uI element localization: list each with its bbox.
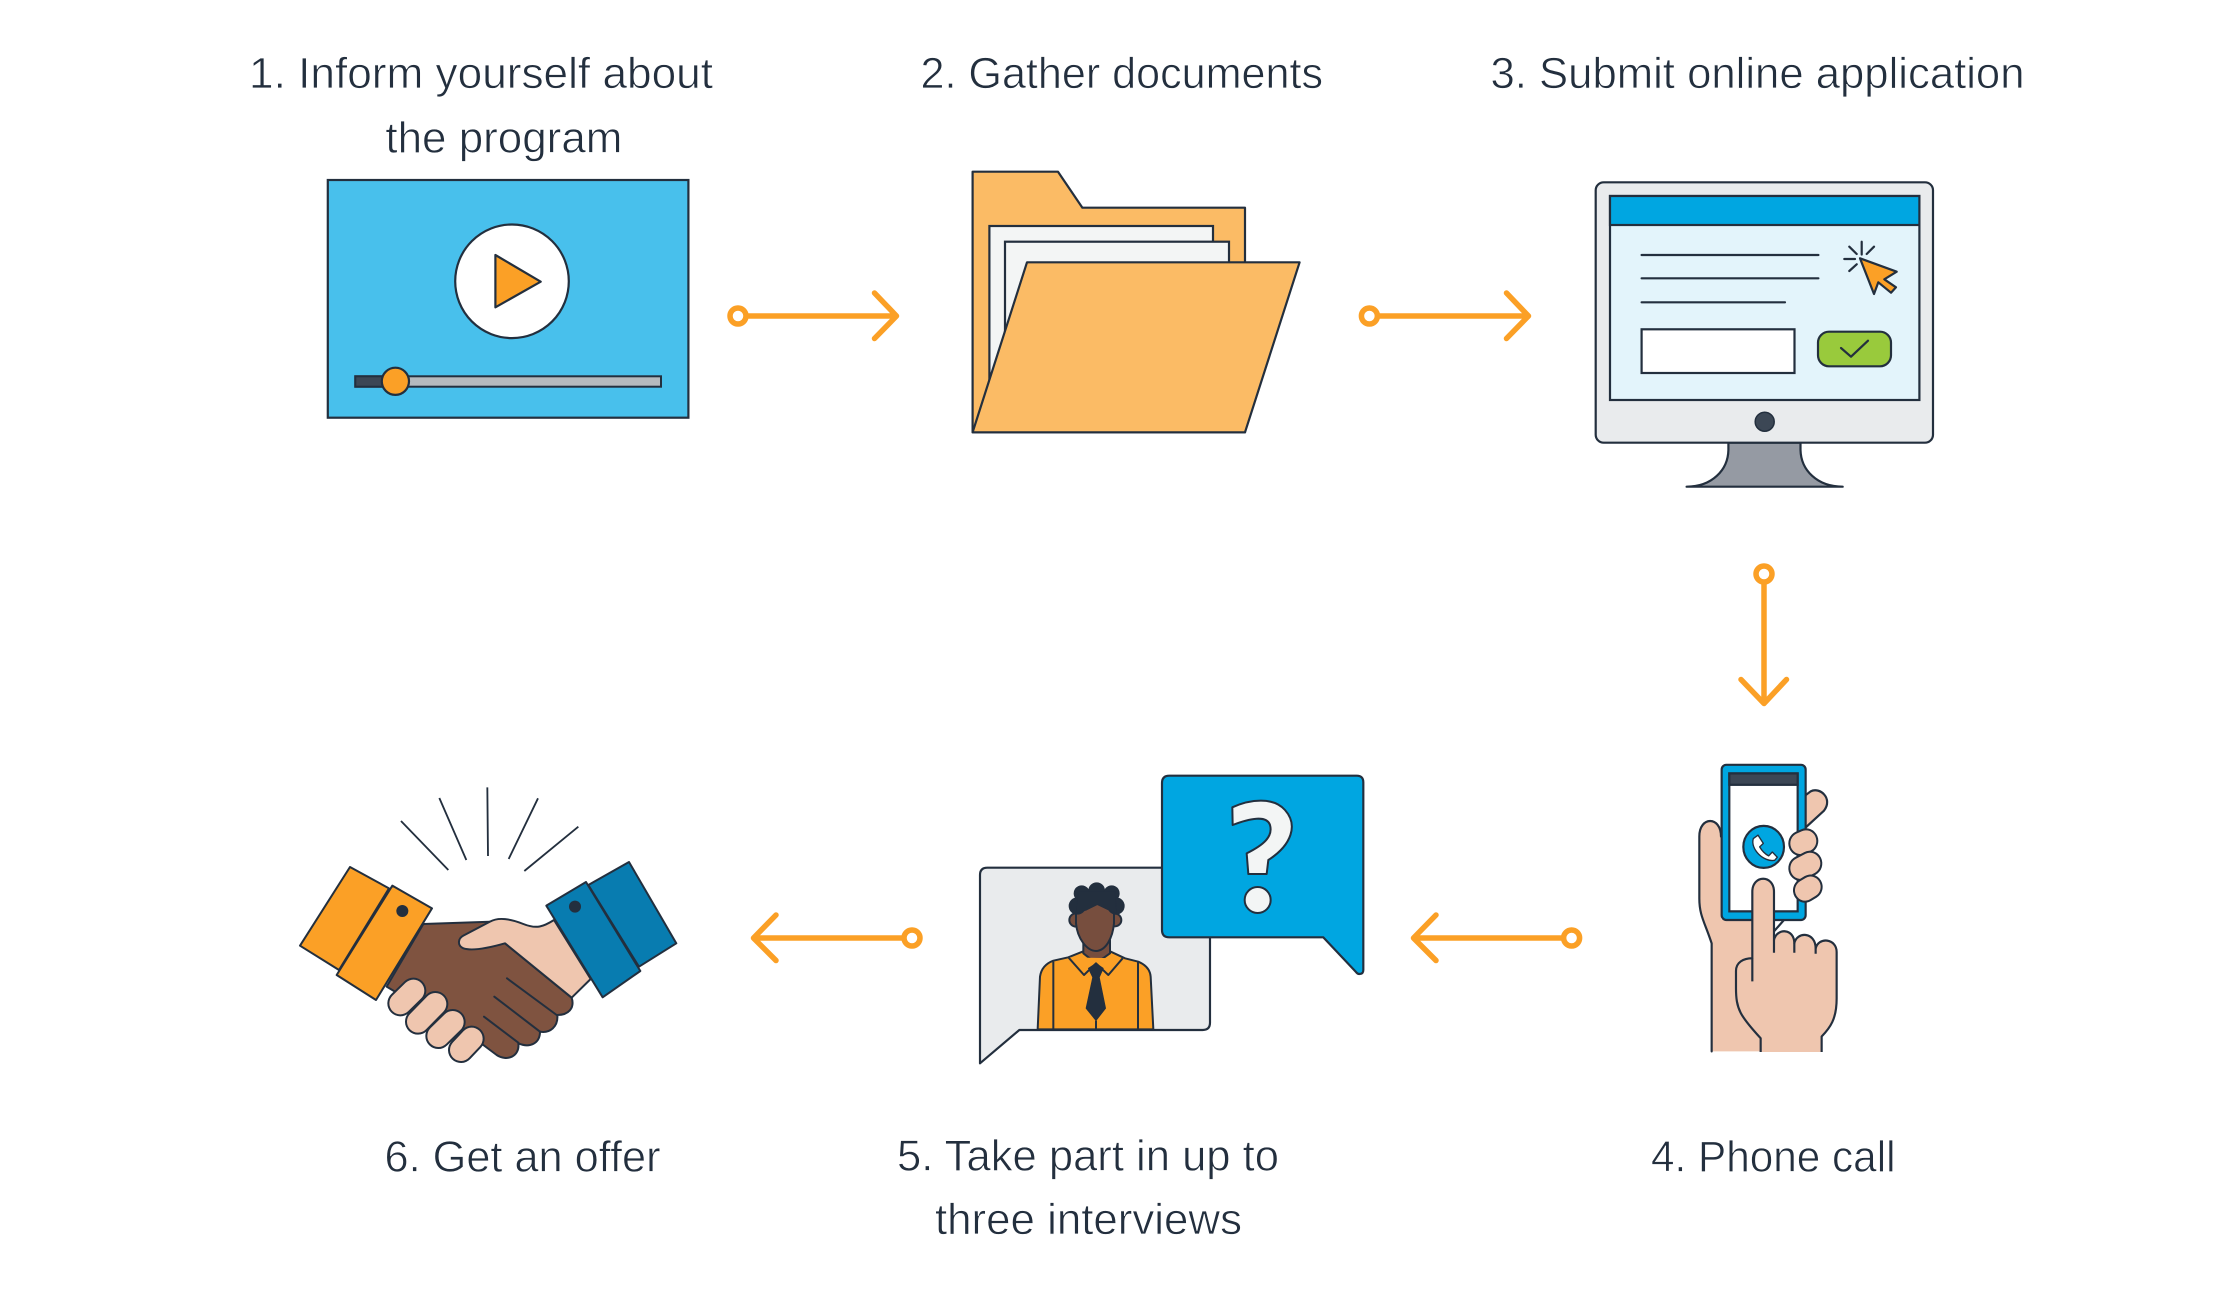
icon: folder with documents <box>973 172 1300 432</box>
check mark <box>1841 341 1868 357</box>
step 5 label: three interviews <box>935 1195 1242 1244</box>
pointing hand <box>1736 879 1837 1052</box>
step 1 label: 1. Inform yourself about <box>249 49 713 98</box>
phone status bar <box>1729 773 1798 785</box>
question mark <box>1232 801 1292 874</box>
icon: handshake <box>300 787 676 1058</box>
arrow: step 5 to step 6 <box>754 915 920 960</box>
call button <box>1743 826 1784 868</box>
monitor stand <box>1687 443 1843 487</box>
monitor body <box>1596 182 1933 443</box>
light hand <box>459 919 591 998</box>
arrow: step 2 to step 3 <box>1361 293 1528 338</box>
gripping fingers <box>400 991 472 1050</box>
orange cuff <box>300 867 389 970</box>
arrow: step 1 to step 2 <box>730 293 896 338</box>
icon: interview speech bubbles <box>980 776 1363 1063</box>
arrow: step 4 to step 5 <box>1414 915 1580 960</box>
gripping fingers <box>1801 841 1811 890</box>
blue speech bubble <box>1162 776 1363 974</box>
brown hand <box>387 922 573 1058</box>
interviewee <box>1038 883 1153 1029</box>
cursor click rays <box>1844 242 1874 271</box>
step 4 label: 4. Phone call <box>1651 1133 1896 1182</box>
monitor screen <box>1610 196 1919 400</box>
cursor arrow <box>1860 258 1897 294</box>
form text lines <box>1642 255 1818 302</box>
arrow: step 3 to step 4 <box>1741 566 1786 704</box>
blue cuff <box>588 862 676 967</box>
holding hand <box>1699 821 1774 1051</box>
back finger <box>1803 790 1827 830</box>
step 2 label: 2. Gather documents <box>920 49 1323 98</box>
gray speech bubble <box>980 868 1210 1063</box>
step 3 label: 3. Submit online application <box>1490 49 2024 98</box>
step 6 label: 6. Get an offer <box>384 1133 660 1182</box>
power button <box>1755 412 1774 431</box>
phone body <box>1722 765 1806 920</box>
input box <box>1642 329 1794 373</box>
green submit button <box>1818 332 1891 366</box>
browser header <box>1610 196 1919 225</box>
burst rays <box>401 787 578 871</box>
icon: video player <box>328 180 688 418</box>
phone screen <box>1729 773 1798 911</box>
step 1 label <box>249 49 713 162</box>
handset glyph <box>1753 835 1777 861</box>
step 5 label: 5. Take part in up to <box>897 1132 1279 1181</box>
icon: computer monitor with online form <box>1596 182 1933 487</box>
step 5 label <box>897 1132 1279 1244</box>
icon: hands holding phone <box>1699 765 1837 1052</box>
step 1 label: the program <box>385 113 622 162</box>
finger separators <box>484 978 557 1043</box>
